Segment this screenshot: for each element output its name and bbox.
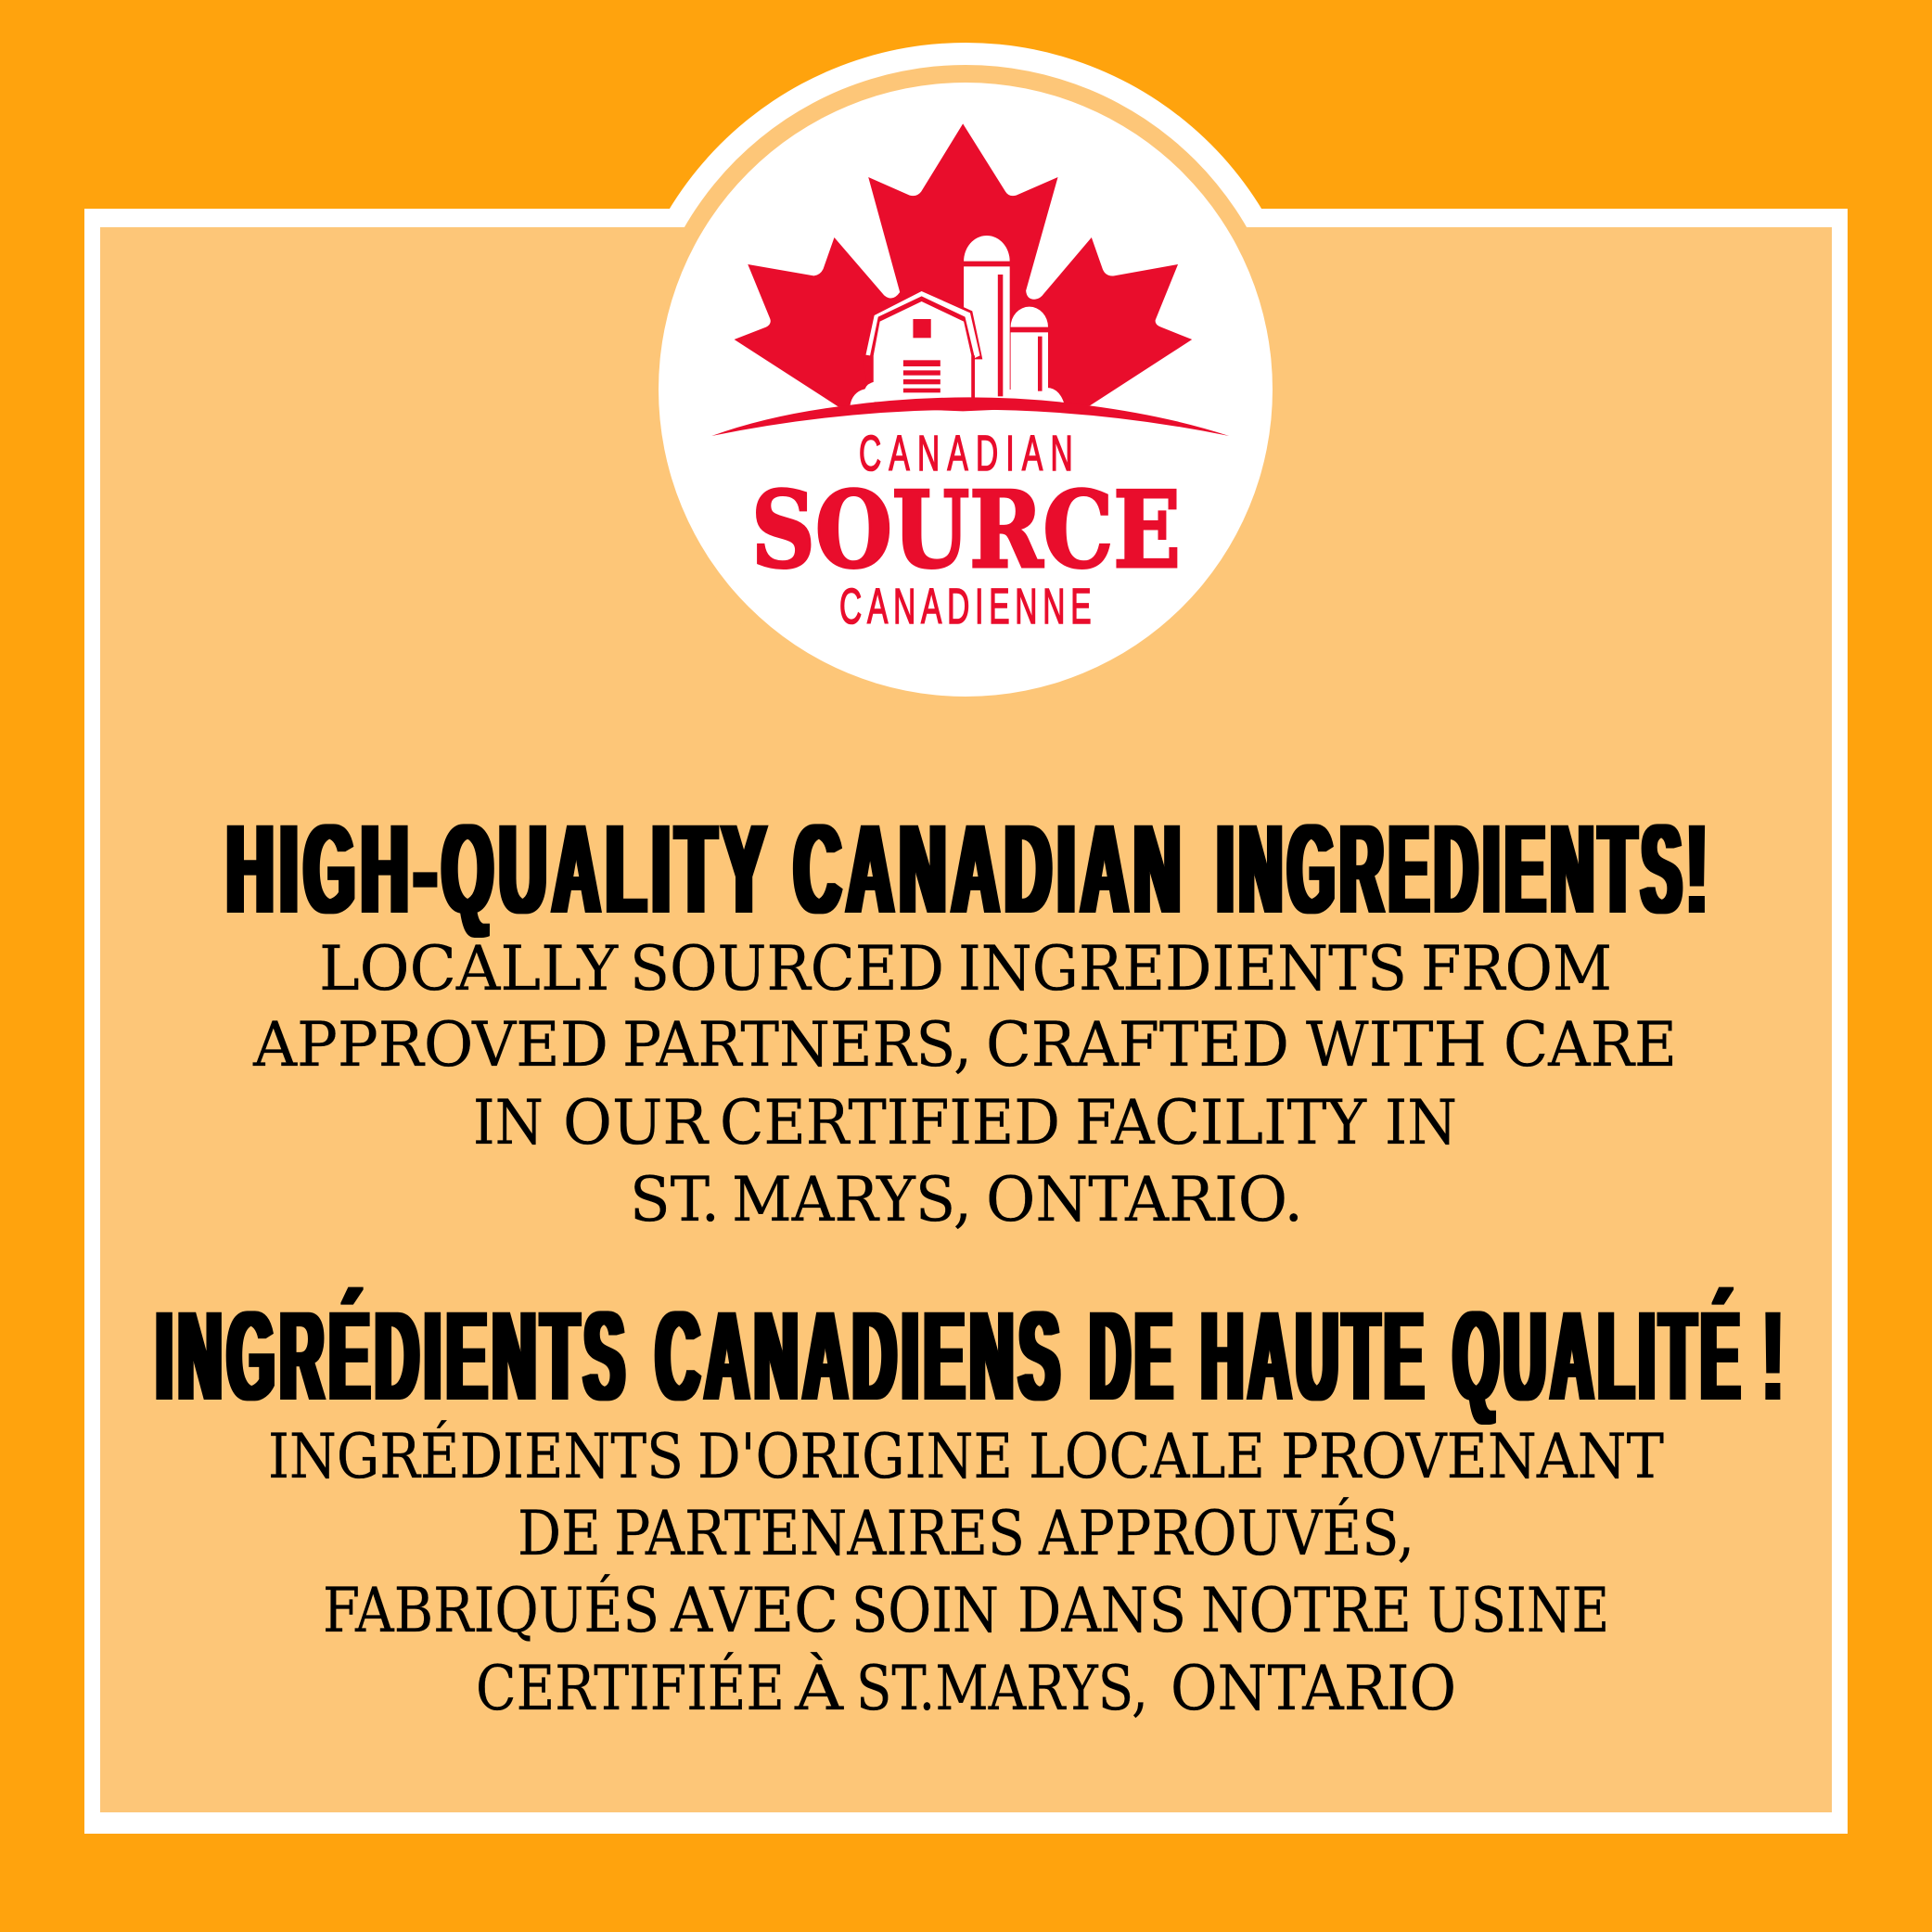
text block: English description: INGREDIENTS [958, 933, 1407, 1004]
text block: English description: MARYS, [732, 1164, 972, 1235]
text block: French description [268, 1421, 1664, 1724]
text block: French description: SOIN [851, 1575, 999, 1646]
text block: French description: PARTENAIRES [614, 1498, 1025, 1569]
logo text: CANADIENNE: CANADIENNE [839, 578, 1092, 634]
text block: French description: NOTRE [1201, 1575, 1412, 1646]
text block: English description: LOCALLY [319, 933, 619, 1004]
text block: English description: CARE [1503, 1009, 1677, 1081]
logo text: SOURCE: SOURCE [751, 468, 1181, 592]
text block: French description: ST.MARYS, [856, 1653, 1148, 1724]
logo: Canadian Source badge [659, 83, 1273, 697]
infographic canvas: ! [1764, 1286, 1786, 1427]
text block: English description: WITH [1306, 1009, 1487, 1081]
text block: English description: ONTARIO. [986, 1164, 1303, 1235]
text block: French description: FABRIQUÉS [323, 1575, 659, 1646]
text block: English description: CERTIFIED [720, 1087, 1060, 1158]
text block: French description: D'ORIGINE [697, 1421, 1013, 1492]
text block: French description: DE [518, 1498, 601, 1569]
text block: English description: IN [473, 1087, 544, 1158]
text block: English description: ST. [630, 1164, 720, 1235]
heading: French [156, 1286, 1786, 1427]
text block: English description: PARTNERS, [622, 1009, 972, 1081]
text block: French description: LOCALE [1029, 1421, 1265, 1492]
text block: English description: APPROVED [252, 1009, 608, 1081]
icon: maple leaf with barn and silos [711, 123, 1229, 436]
heading: English: HIGH-QUALITY [226, 799, 772, 940]
text block: French description: À [794, 1653, 844, 1724]
text block: French description: DANS [1017, 1575, 1186, 1646]
text block: English description [252, 933, 1677, 1235]
text block: French description: AVEC [670, 1575, 838, 1646]
text block: French description: ONTARIO [1171, 1653, 1456, 1724]
text block: English description: IN [1385, 1087, 1457, 1158]
text block: English description: FACILITY [1075, 1087, 1367, 1158]
heading: French: CANADIENS [656, 1286, 1065, 1427]
text block: English description: OUR [563, 1087, 710, 1158]
logo text: CANADIAN: CANADIAN [859, 425, 1073, 481]
text block: French description: INGRÉDIENTS [268, 1421, 684, 1492]
text block: English description: CRAFTED [986, 1009, 1289, 1081]
text block: French description: CERTIFIÉE [476, 1653, 785, 1724]
heading: French: HAUTE [1201, 1286, 1428, 1427]
text block: French description: PROVENANT [1281, 1421, 1664, 1492]
heading: French: INGRÉDIENTS [156, 1286, 630, 1427]
heading: French: DE [1090, 1286, 1177, 1427]
heading: English: CANADIAN [794, 799, 1186, 940]
text block: French description: USINE [1427, 1575, 1609, 1646]
text block: English description: SOURCED [630, 933, 944, 1004]
text block: French description: APPROUVÉS, [1038, 1498, 1414, 1569]
text block: English description: FROM [1421, 933, 1612, 1004]
